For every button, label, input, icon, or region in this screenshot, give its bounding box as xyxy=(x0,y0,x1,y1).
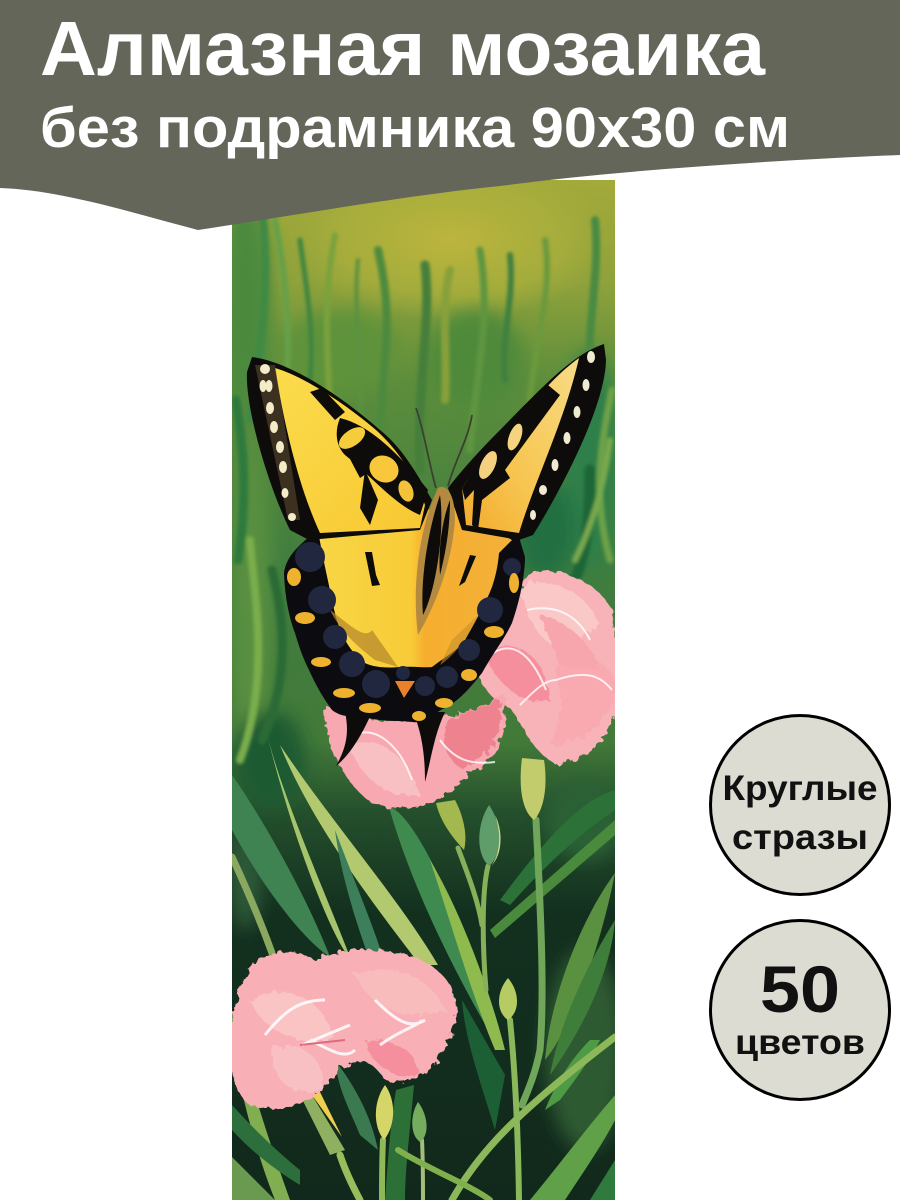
right forewing black band xyxy=(462,385,560,530)
background grass xyxy=(236,210,612,760)
tails xyxy=(336,716,370,766)
forewing black band xyxy=(310,388,428,525)
badge: 50 colors: 50 xyxy=(760,952,840,1026)
orange eyespot xyxy=(395,681,415,698)
body xyxy=(416,487,455,635)
foreground grass xyxy=(232,730,615,1200)
left wing mark xyxy=(365,552,380,586)
badge: round rhinestones: Круглые xyxy=(722,769,878,808)
hindwing yellow bars xyxy=(287,568,519,721)
badge: round rhinestones: стразы xyxy=(732,818,868,857)
butterfly xyxy=(247,344,606,782)
left forewing xyxy=(247,357,432,540)
banner xyxy=(0,0,900,230)
carnation: bottom left xyxy=(229,949,457,1109)
hindwing yellow xyxy=(318,505,512,668)
badge: 50 colors xyxy=(710,920,890,1100)
right forewing xyxy=(448,344,606,540)
hindwings xyxy=(284,505,525,722)
badge: round rhinestones xyxy=(710,716,890,894)
subtitle: без подрамника 90х30 см xyxy=(40,96,790,160)
carnation: right xyxy=(478,571,622,764)
right wing mark xyxy=(459,555,476,586)
background colour washes xyxy=(217,190,625,1150)
title: Алмазная мозаика xyxy=(40,6,766,92)
antennae xyxy=(416,408,472,488)
badge: 50 colors: цветов xyxy=(735,1023,865,1062)
stems xyxy=(232,820,615,1200)
flower buds xyxy=(376,758,546,1142)
blue spots xyxy=(295,542,521,698)
painting: butterfly on carnations xyxy=(217,160,625,1200)
carnation: middle xyxy=(325,695,506,808)
